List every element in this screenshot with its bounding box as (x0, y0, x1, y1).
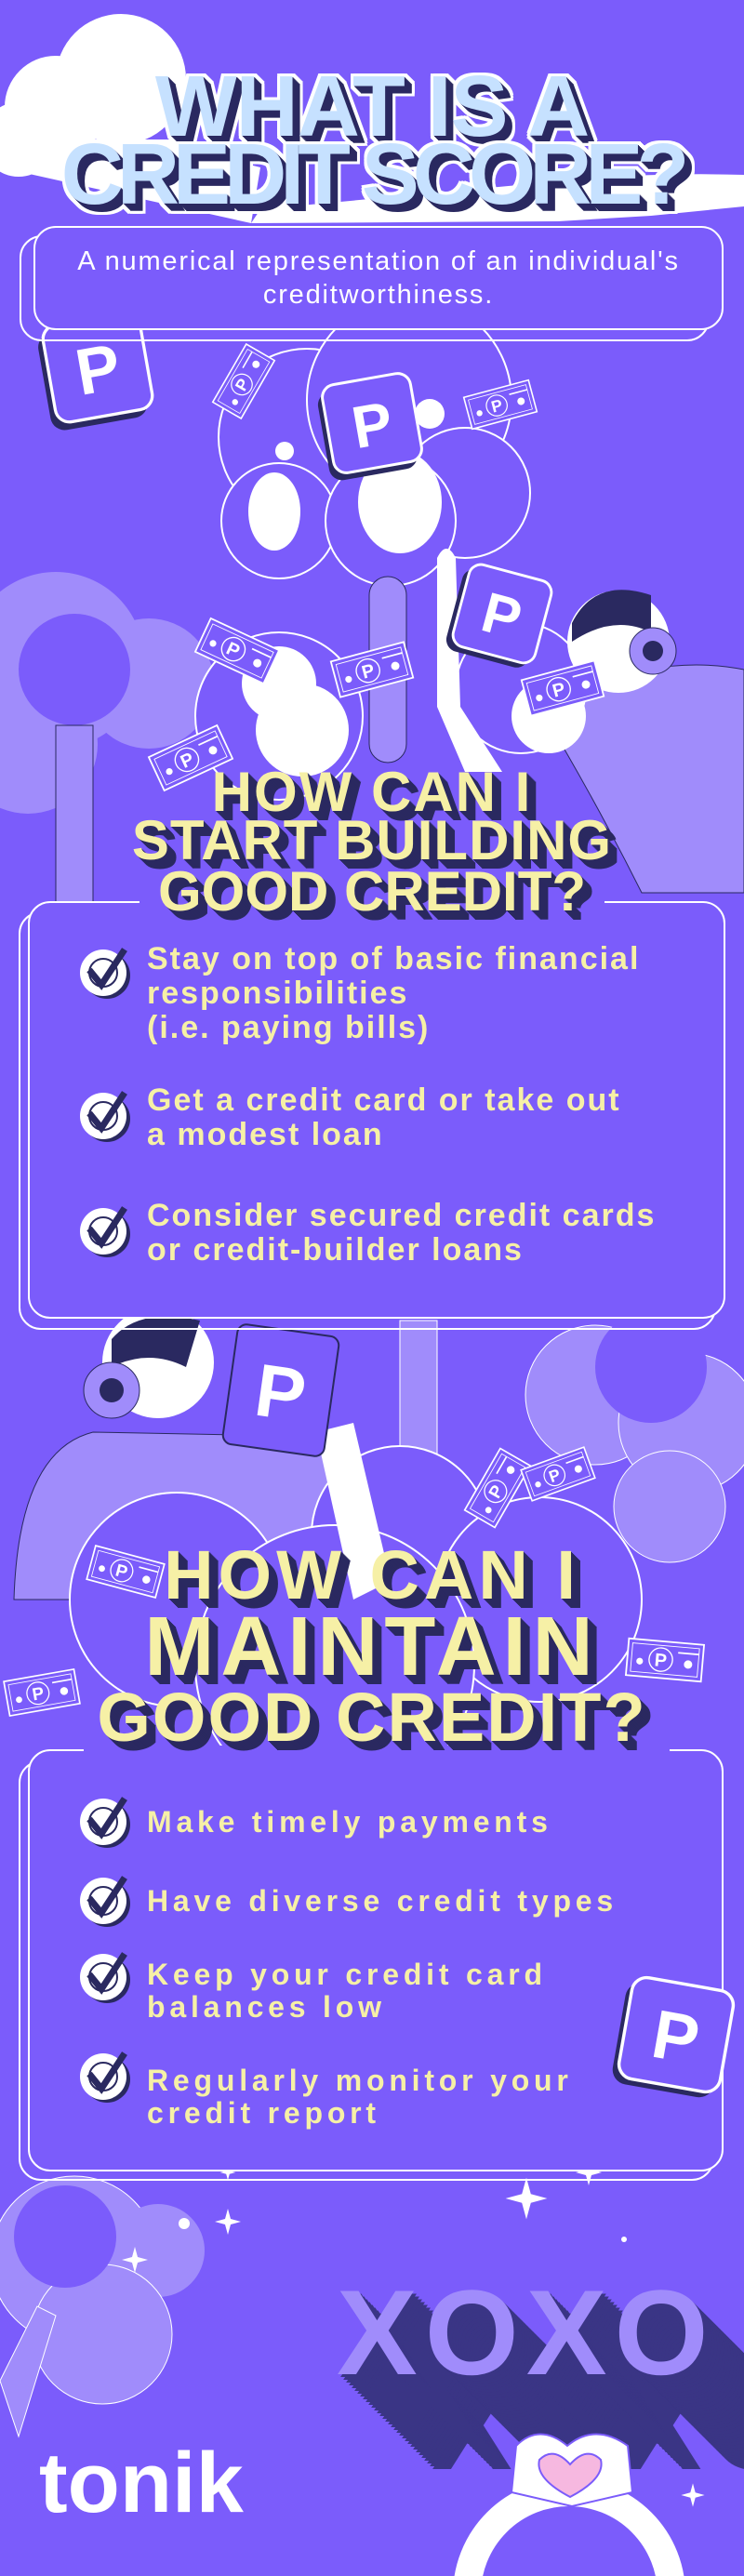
text: HOW CAN I (212, 761, 532, 823)
text: CREDIT SCORE? (61, 126, 683, 222)
list: building credit (80, 941, 656, 1268)
white cloud behind title (0, 14, 744, 223)
panel: start building good credit (19, 901, 725, 1330)
item 4: Regularly monitor your (147, 2064, 573, 2097)
definition text: creditworthiness. (263, 280, 494, 310)
item 2: Get a credit card or take out (147, 1082, 621, 1118)
panel: definition (20, 226, 724, 341)
icon: heart hands ring (454, 2433, 684, 2576)
item 2: Have diverse credit types (147, 1884, 618, 1918)
icon: check (80, 1206, 130, 1257)
title (61, 58, 695, 222)
item 3 (147, 1958, 547, 2024)
heading: how can I maintain good credit (97, 1536, 651, 1756)
item 3: balances low (147, 1990, 386, 2024)
icon: peso coin (612, 1975, 735, 2098)
xoxo: XOXO (337, 2264, 716, 2400)
item 3 (147, 1198, 656, 1268)
bottom illustration (0, 2124, 705, 2507)
item 4 (147, 2064, 573, 2130)
definition text (77, 246, 680, 310)
item 1 (147, 941, 640, 1045)
section 2 illustration: P (250, 1348, 311, 1437)
text: START BUILDING (132, 809, 612, 871)
text: GOOD CREDIT? (158, 860, 586, 923)
definition text: A numerical representation of an individual's (77, 246, 680, 276)
icon: check (80, 2052, 130, 2103)
text: MAINTAIN (144, 1600, 600, 1693)
list: maintaining credit (80, 1797, 618, 2130)
item 1: Make timely payments (147, 1805, 552, 1839)
text: GOOD CREDIT? (97, 1679, 647, 1756)
icon: check (80, 1876, 130, 1927)
item 1: Stay on top of basic financial (147, 941, 640, 976)
heading: how can I start building good credit (132, 761, 618, 923)
icon: check (80, 1797, 130, 1848)
item 2: a modest loan (147, 1117, 384, 1152)
section 2 illustration (4, 1307, 744, 1804)
item 1: (i.e. paying bills) (147, 1010, 430, 1045)
text: WHAT IS A (155, 58, 589, 154)
item 1: responsibilities (147, 976, 408, 1011)
item 3: or credit-builder loans (147, 1232, 524, 1268)
item 2 (147, 1082, 621, 1152)
panel: maintain good credit (19, 1746, 724, 2181)
icon: check (80, 948, 130, 999)
icon: peso coin: P (646, 1995, 705, 2078)
icon: check (80, 1952, 130, 2003)
section 1 illustration (0, 298, 744, 911)
item 4: credit report (147, 2096, 380, 2130)
icon: check (80, 1091, 130, 1142)
item 3: Consider secured credit cards (147, 1198, 656, 1233)
item 3: Keep your credit card (147, 1958, 547, 1991)
text: HOW CAN I (164, 1536, 580, 1613)
logo: tonik: tonik (39, 2436, 244, 2530)
